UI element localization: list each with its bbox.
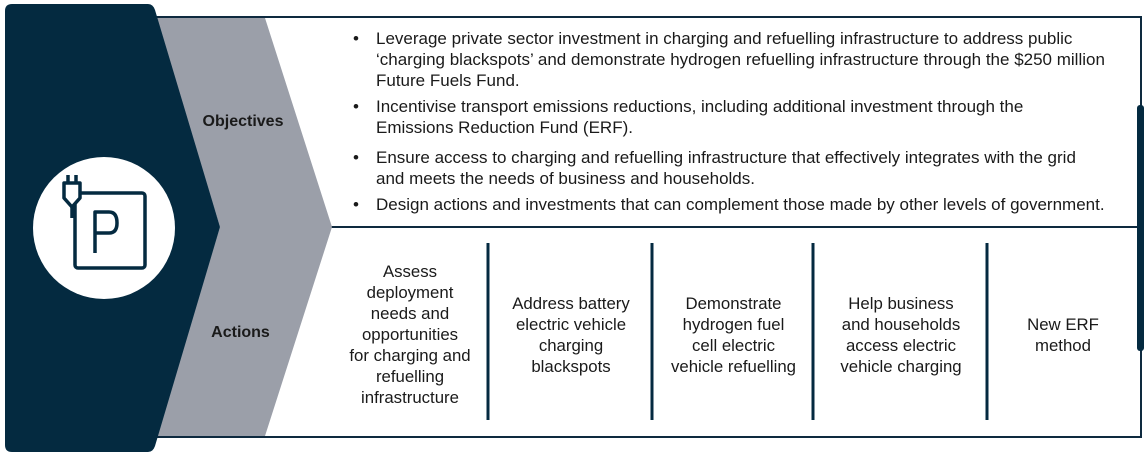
action 4 (840, 294, 962, 376)
objectives list: and meets the needs of business and households. (376, 169, 755, 188)
action 5: method (1035, 336, 1091, 354)
objectives list: Emissions Reduction Fund (ERF). (376, 118, 633, 137)
action 1 (349, 262, 471, 407)
action 1: opportunities (362, 325, 458, 344)
action 1: deployment (367, 283, 453, 302)
dark chevron panel (5, 4, 220, 452)
action 2: electric vehicle (516, 314, 626, 334)
gray chevron (155, 18, 332, 436)
action 5 (1027, 314, 1099, 354)
action 1: refuelling (376, 367, 444, 386)
action 3 (671, 294, 796, 376)
action 2: charging (539, 336, 603, 354)
objectives list: ‘charging blackspots’ and demonstrate hydrogen refuelling infrastructure through the $250 million (376, 50, 1105, 69)
label: Objectives: Objectives (203, 113, 283, 130)
objectives list: Design actions and investments that can complement those made by other levels of government. (376, 195, 1105, 214)
action 1: infrastructure (361, 388, 459, 407)
icon: plug parking (33, 157, 175, 299)
right thick bar (1137, 105, 1144, 351)
label: Actions: Actions (211, 324, 270, 341)
action dividers (488, 243, 987, 420)
action 2: Address battery (512, 294, 630, 312)
action 3: vehicle refuelling (671, 356, 796, 376)
action 3: hydrogen fuel (683, 314, 784, 334)
action 5: New ERF (1027, 314, 1099, 334)
action 1: for charging and (349, 346, 471, 365)
action 4: Help business (848, 294, 954, 312)
objectives list (354, 29, 1105, 214)
objectives list: Ensure access to charging and refuelling infrastructure that effectively integrates with the grid (376, 148, 1076, 167)
action 2: blackspots (531, 356, 611, 376)
action 4: vehicle charging (840, 356, 962, 376)
box outline (150, 17, 1141, 437)
action 3: Demonstrate (685, 294, 782, 312)
action 1: Assess (383, 262, 437, 281)
action 1: needs and (371, 304, 449, 323)
action 3: cell electric (692, 336, 775, 354)
objectives list: Future Fuels Fund. (376, 71, 520, 90)
objectives list: Leverage private sector investment in charging and refuelling infrastructure to address public (376, 29, 1072, 48)
action 4: and households (842, 314, 960, 334)
action 4: access electric (846, 336, 956, 354)
action 2 (512, 294, 630, 376)
objectives list: Incentivise transport emissions reductions, including additional investment through the (376, 97, 1023, 116)
